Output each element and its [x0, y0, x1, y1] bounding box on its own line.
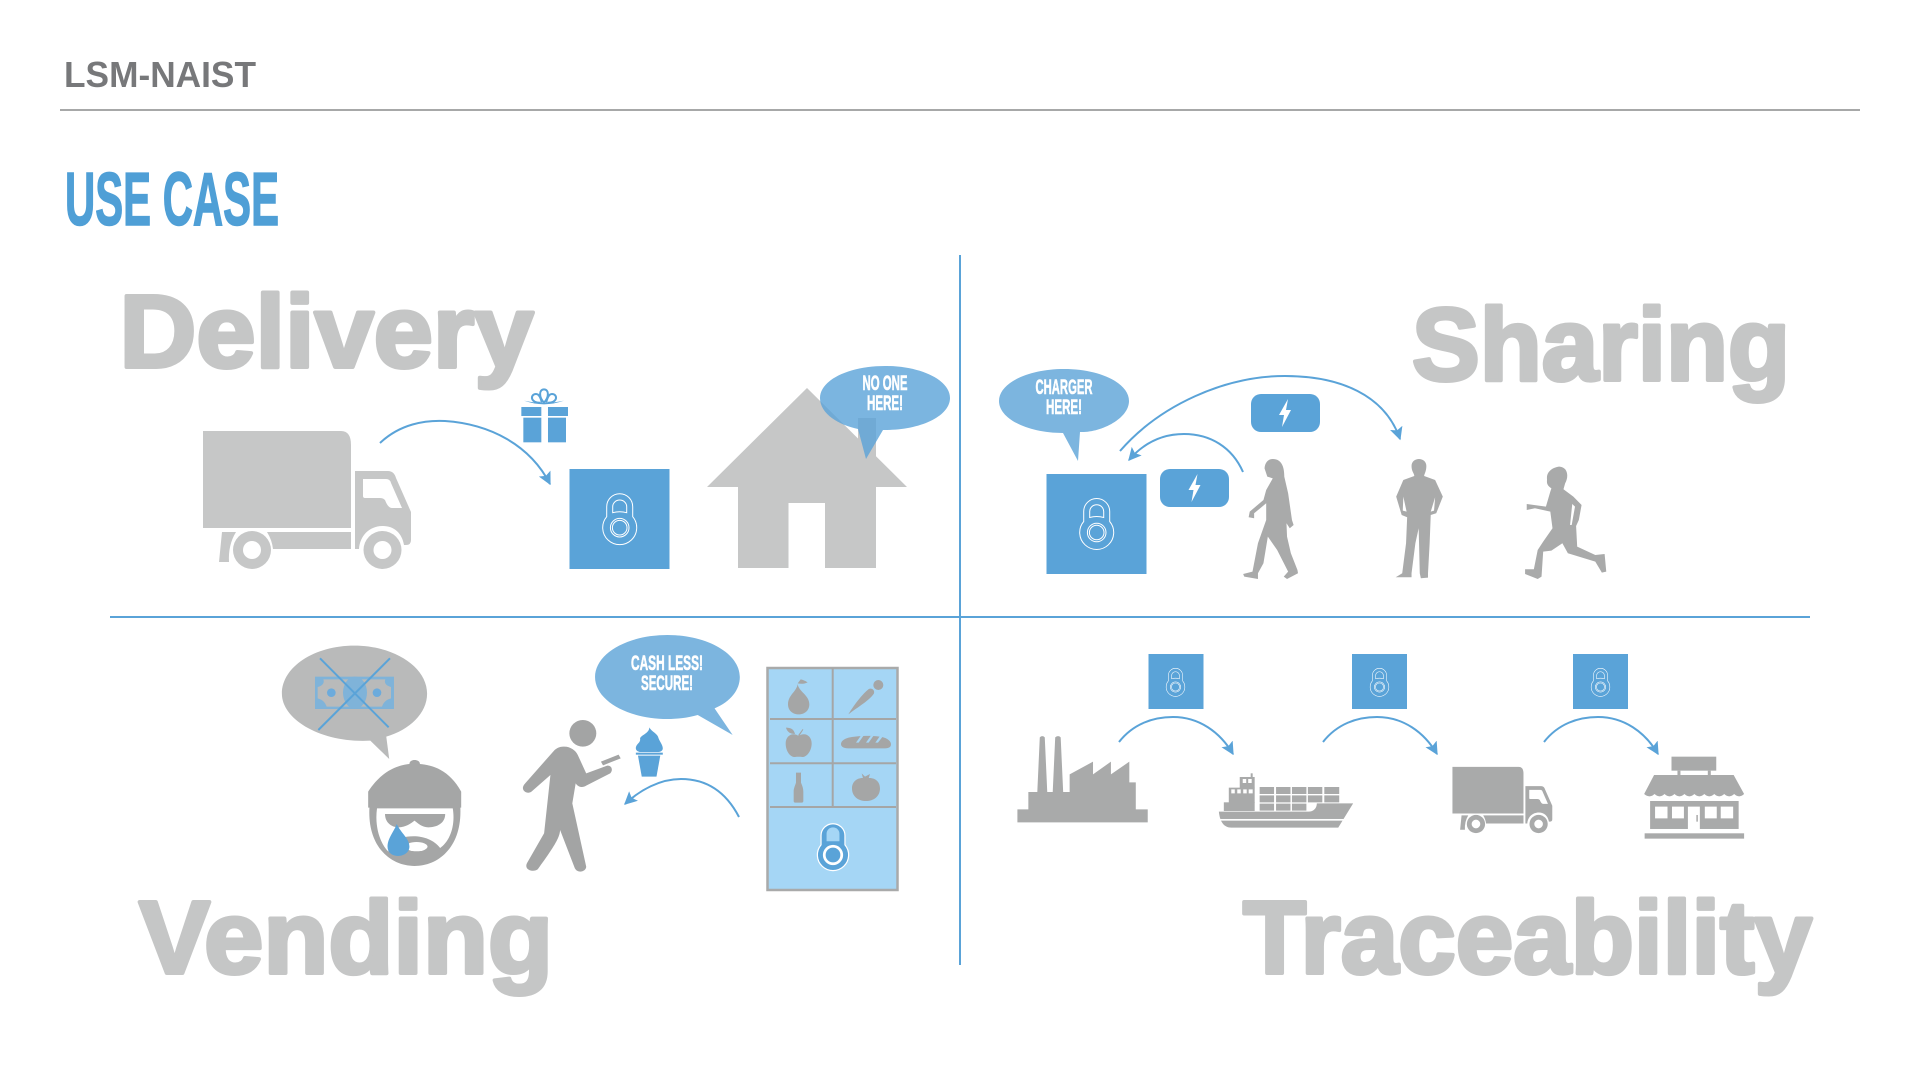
speech bubble: charger here — [999, 369, 1129, 461]
speech bubble: no one here: HERE! — [867, 392, 903, 415]
icon: house — [707, 388, 907, 568]
heading: sharing: Sharing — [1412, 287, 1790, 402]
arrow: truck to locker — [380, 421, 550, 484]
icon: lock box two — [1352, 654, 1407, 709]
panel: vending — [139, 635, 898, 995]
icon: crossed out banknote — [315, 658, 394, 730]
speech bubble: no one here — [820, 366, 950, 459]
icon: smart lock box — [570, 469, 670, 569]
arrow: ship to truck — [1323, 717, 1437, 754]
icon: cargo ship — [1219, 773, 1353, 828]
icon: machine lock — [817, 824, 849, 871]
panel: delivery — [120, 274, 950, 569]
heading: vending: Vending — [139, 880, 553, 995]
text: cash less secure: CASH LESS! — [631, 652, 703, 675]
icon: people silhouettes — [1243, 459, 1606, 579]
icon: crying thief — [368, 760, 461, 866]
icon: charger tag upper — [1251, 394, 1320, 432]
illustration: thief and buyer — [282, 635, 740, 872]
icons: supply chain — [1017, 736, 1353, 828]
icon: charger tag lower — [1160, 469, 1229, 507]
speech bubble: charger here: CHARGER — [1036, 376, 1092, 399]
arrow: factory to ship — [1119, 717, 1233, 754]
panel: sharing — [999, 287, 1790, 579]
icon: lock box one — [1148, 654, 1204, 709]
panel: traceability — [1017, 654, 1812, 995]
arrow: woman to box — [1129, 434, 1243, 472]
speech bubble: no one here: NO ONE — [862, 372, 908, 395]
text: cash less secure — [631, 652, 703, 695]
icon: delivery truck — [203, 431, 411, 569]
section title: USE CASE — [65, 157, 279, 241]
icon: factory — [1017, 736, 1148, 822]
icon: buyer with phone — [523, 720, 621, 872]
icon: store — [1644, 757, 1744, 839]
speech bubble: thief — [282, 646, 427, 759]
arrow: machine to buyer — [625, 779, 739, 817]
icon: ice cream — [636, 727, 663, 777]
heading: delivery: Delivery — [120, 274, 534, 389]
icon: lock box three — [1573, 654, 1628, 709]
icon: smart lock box — [1046, 474, 1146, 574]
text: cash less secure: SECURE! — [641, 672, 693, 695]
icons: shelf goods — [786, 679, 891, 803]
icon: truck small — [1452, 767, 1552, 833]
header label: LSM-NAIST — [64, 54, 256, 95]
vending machine — [768, 668, 898, 890]
speech bubble: cash less — [595, 635, 740, 735]
icon: gift — [521, 389, 568, 442]
heading: traceability: Traceability — [1243, 880, 1812, 995]
speech bubble: charger here: HERE! — [1046, 396, 1082, 419]
arrow: box to man — [1120, 376, 1400, 451]
arrow: truck to store — [1544, 717, 1658, 754]
